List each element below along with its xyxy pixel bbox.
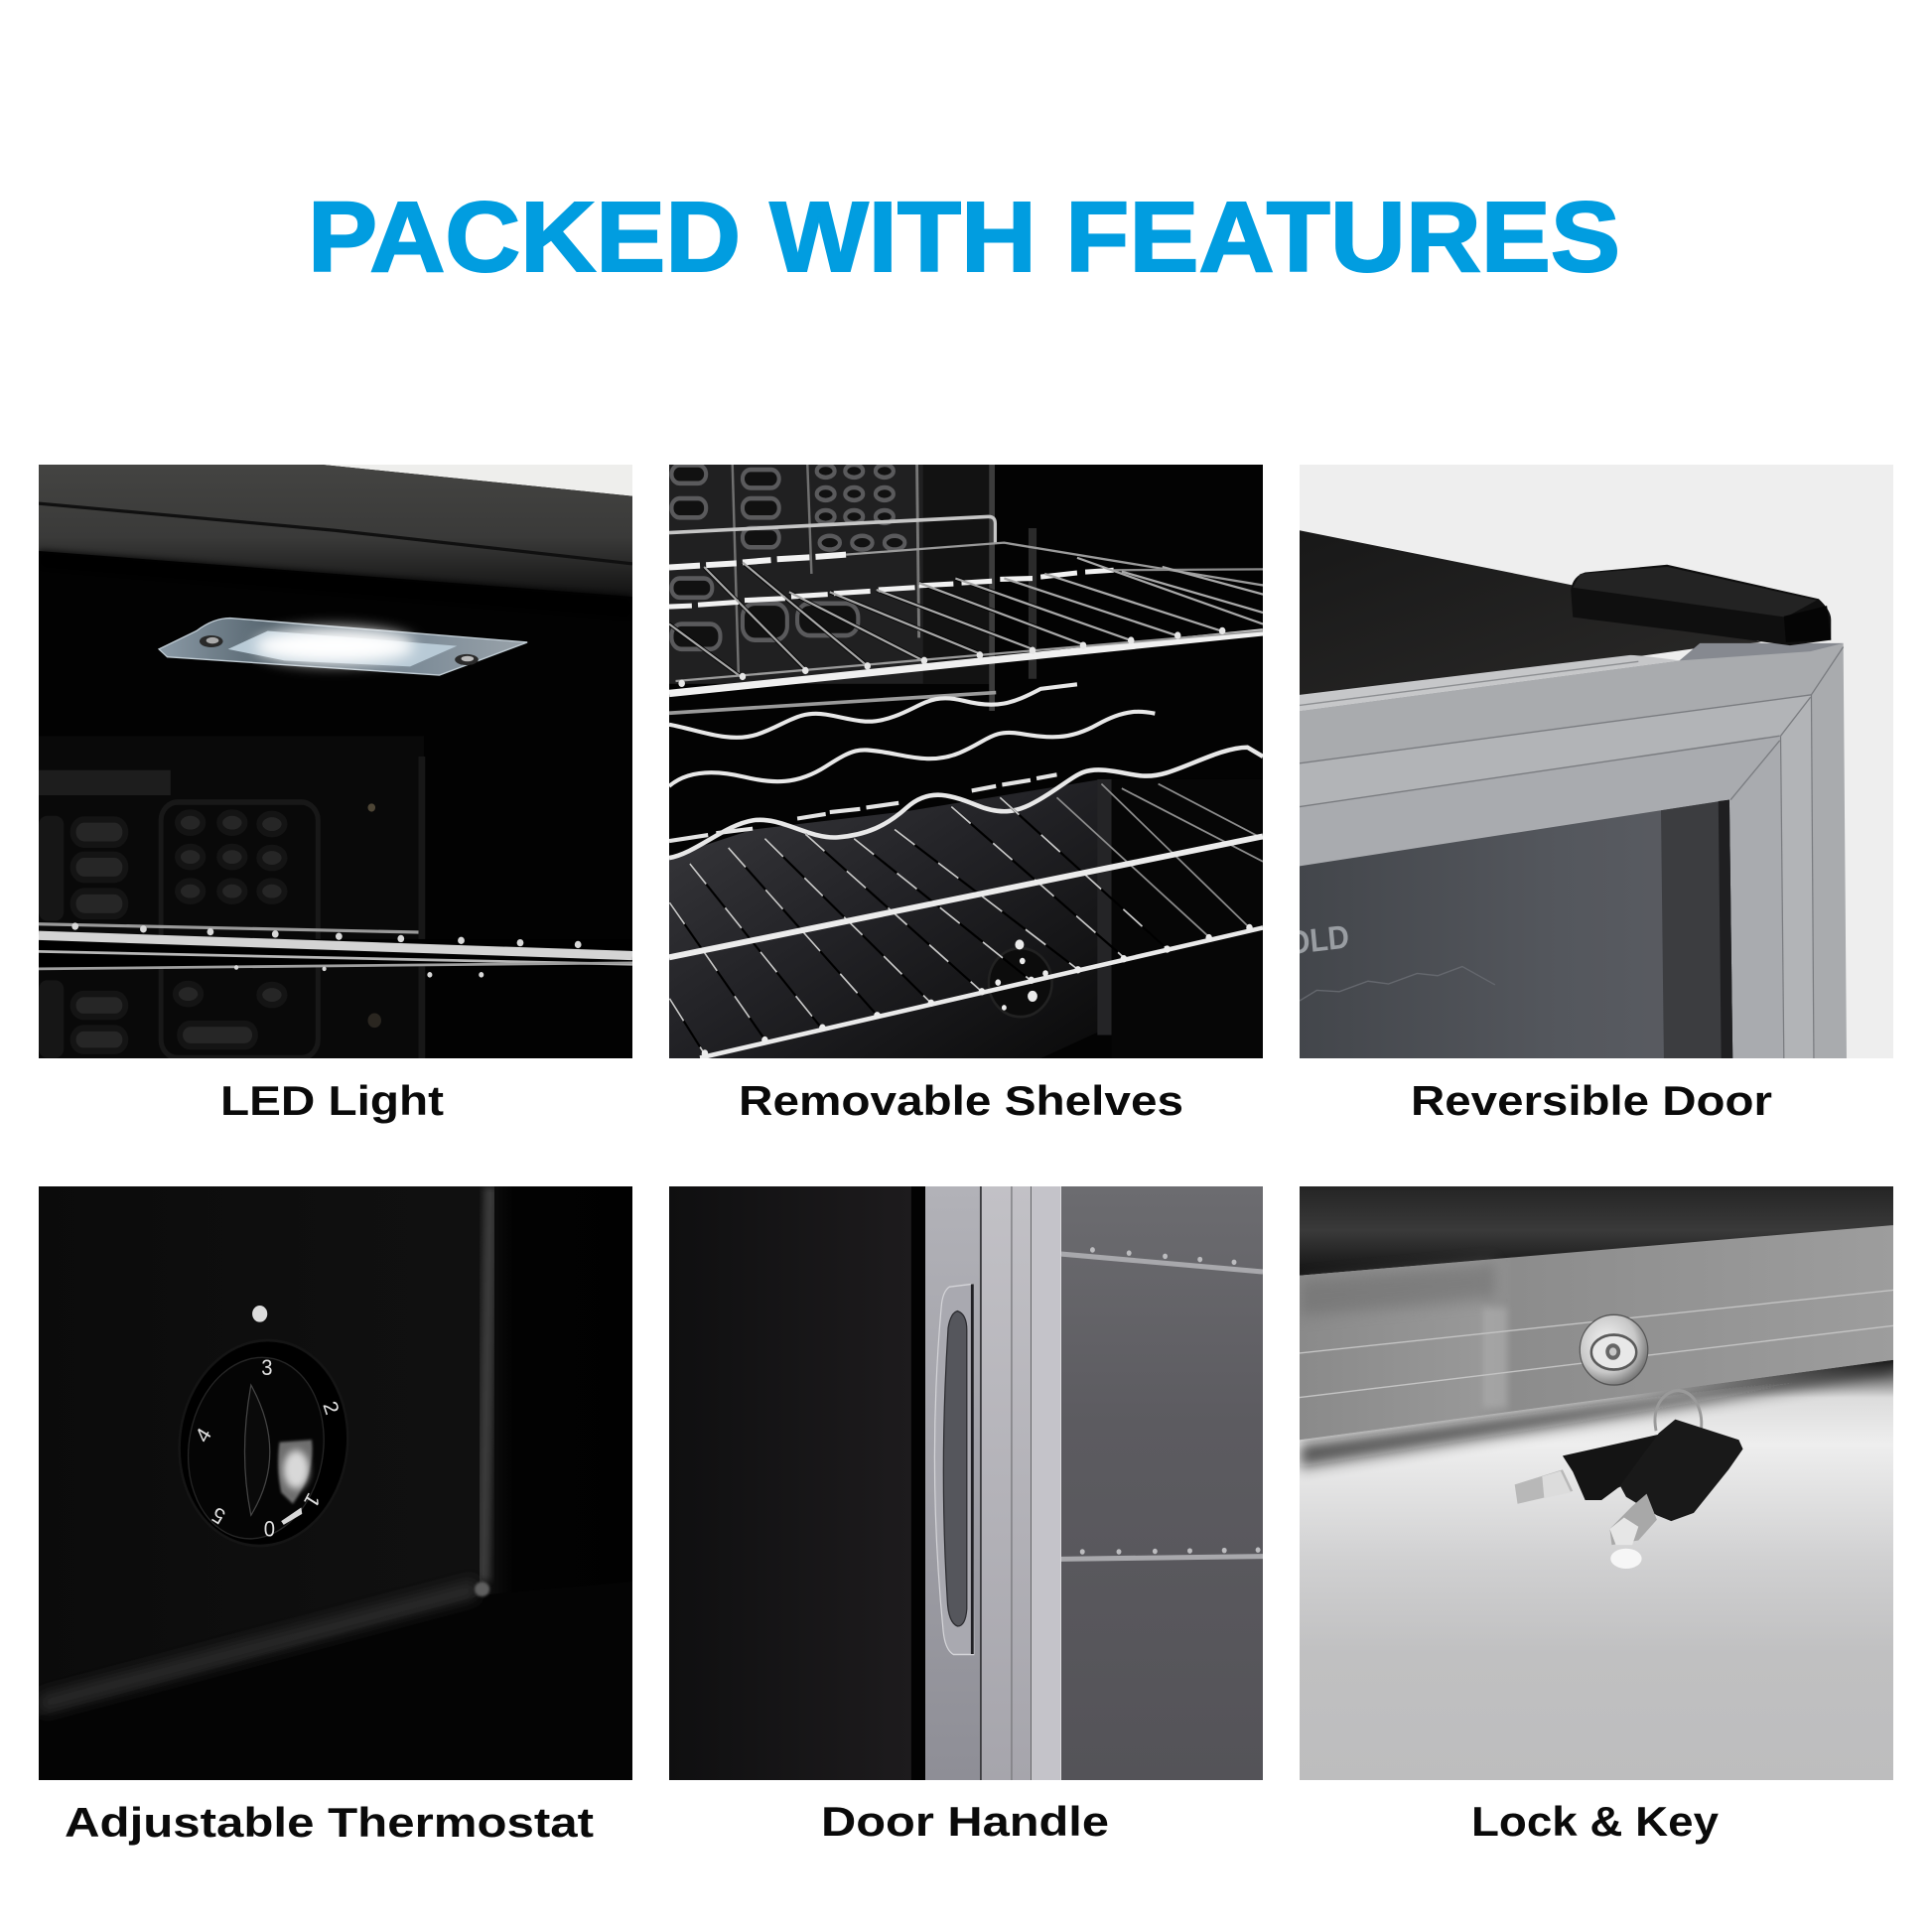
wire shelf: [39, 922, 632, 978]
cabinet top: [1300, 530, 1761, 697]
label: Removable Shelves: Removable Shelves: [739, 1077, 1183, 1124]
bottom floor: [669, 779, 1101, 1058]
label: Reversible Door: Reversible Door: [1411, 1077, 1772, 1124]
lock cylinder: [1580, 1314, 1648, 1385]
lower wire shelves: [669, 774, 1263, 1058]
keys: [1515, 1420, 1743, 1569]
hinge cover: [1571, 565, 1831, 645]
thermostat dial: [162, 1323, 365, 1563]
thermostat dial: 2: [319, 1398, 343, 1418]
back wall panel: [39, 736, 425, 1058]
thermostat dial: 0: [264, 1516, 275, 1540]
door frame: [1300, 643, 1847, 1058]
silver door frame: [925, 1186, 1061, 1780]
glass and shelves: [1061, 1186, 1263, 1780]
panel: removable shelves photo: [669, 465, 1263, 1058]
indicator dot: [252, 1306, 267, 1322]
glass pane: [1286, 800, 1732, 1058]
label: Adjustable Thermostat: Adjustable Thermostat: [65, 1799, 594, 1846]
thermostat dial: 3: [261, 1356, 272, 1380]
panel: LED light photo: [39, 465, 632, 1058]
glass pane: OLD: [1286, 918, 1351, 962]
upper wire shelf: [669, 516, 1263, 713]
label: LED Light: LED Light: [220, 1077, 444, 1124]
steel door rail: [1300, 1225, 1893, 1440]
panel: reversible door photo: [1286, 465, 1893, 1058]
thermostat dial: 1: [300, 1489, 324, 1511]
door handle: [934, 1284, 974, 1654]
title: PACKED WITH FEATURES: [308, 182, 1620, 293]
white shelf surface: [1300, 1360, 1893, 1780]
panel: lock and key photo: [1300, 1186, 1893, 1780]
thermostat dial: 4: [192, 1424, 216, 1447]
dark top band: [1300, 1186, 1893, 1276]
panel: door handle photo: [669, 1186, 1263, 1780]
LED lamp: [159, 619, 527, 675]
rear wall condenser pattern: [669, 465, 1033, 711]
key ring: [1655, 1391, 1702, 1433]
panel: adjustable thermostat photo: [39, 1186, 632, 1780]
wavy bottle racks: [669, 684, 1263, 858]
thermostat dial: 5: [208, 1502, 229, 1529]
label: Door Handle: Door Handle: [821, 1798, 1109, 1845]
label: Lock & Key: Lock & Key: [1471, 1798, 1720, 1845]
